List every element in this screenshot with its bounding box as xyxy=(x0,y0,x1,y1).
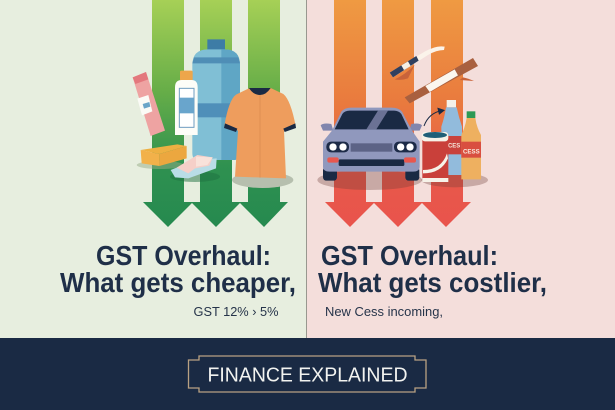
icon: cigar xyxy=(405,58,478,103)
panel: costlier illustration xyxy=(317,0,488,227)
icon: pink tube xyxy=(133,72,165,136)
icon: white lotion bottle xyxy=(175,71,198,135)
icon: bottles and jar with cess labels xyxy=(421,100,488,187)
icon: curved arrow xyxy=(424,108,444,126)
subtext: costlier: New Cess incoming, xyxy=(325,304,443,319)
heading: cheaper: What gets cheaper, xyxy=(60,267,296,298)
subtext: cheaper: GST 12% › 5% xyxy=(194,304,279,319)
heading: costlier xyxy=(318,240,547,298)
icon: bottles and jar with cess labels: CESS xyxy=(463,150,480,156)
panel: costlier background xyxy=(307,0,615,338)
panel: cheaper illustration xyxy=(133,0,296,227)
heading: cheaper xyxy=(60,240,296,298)
icon: large blue bottle xyxy=(192,39,240,160)
heading: cheaper: GST Overhaul: xyxy=(96,240,271,271)
icon: cigarette small xyxy=(390,46,445,80)
panel: cheaper background xyxy=(0,0,307,338)
icon: car xyxy=(317,108,422,190)
arrows: green down xyxy=(143,0,288,227)
icon: orange shirt xyxy=(224,88,296,188)
icon: soap bar xyxy=(170,155,220,182)
heading: costlier: What gets costlier, xyxy=(318,267,547,298)
heading: costlier: GST Overhaul: xyxy=(321,240,498,271)
footer badge: FINANCE EXPLAINED xyxy=(208,364,408,386)
icon: bottles and jar with cess labels: CES xyxy=(448,144,460,150)
icon: yellow sponge xyxy=(137,144,187,169)
footer band xyxy=(0,338,615,410)
arrows: red down xyxy=(325,0,471,227)
footer badge xyxy=(188,356,426,392)
